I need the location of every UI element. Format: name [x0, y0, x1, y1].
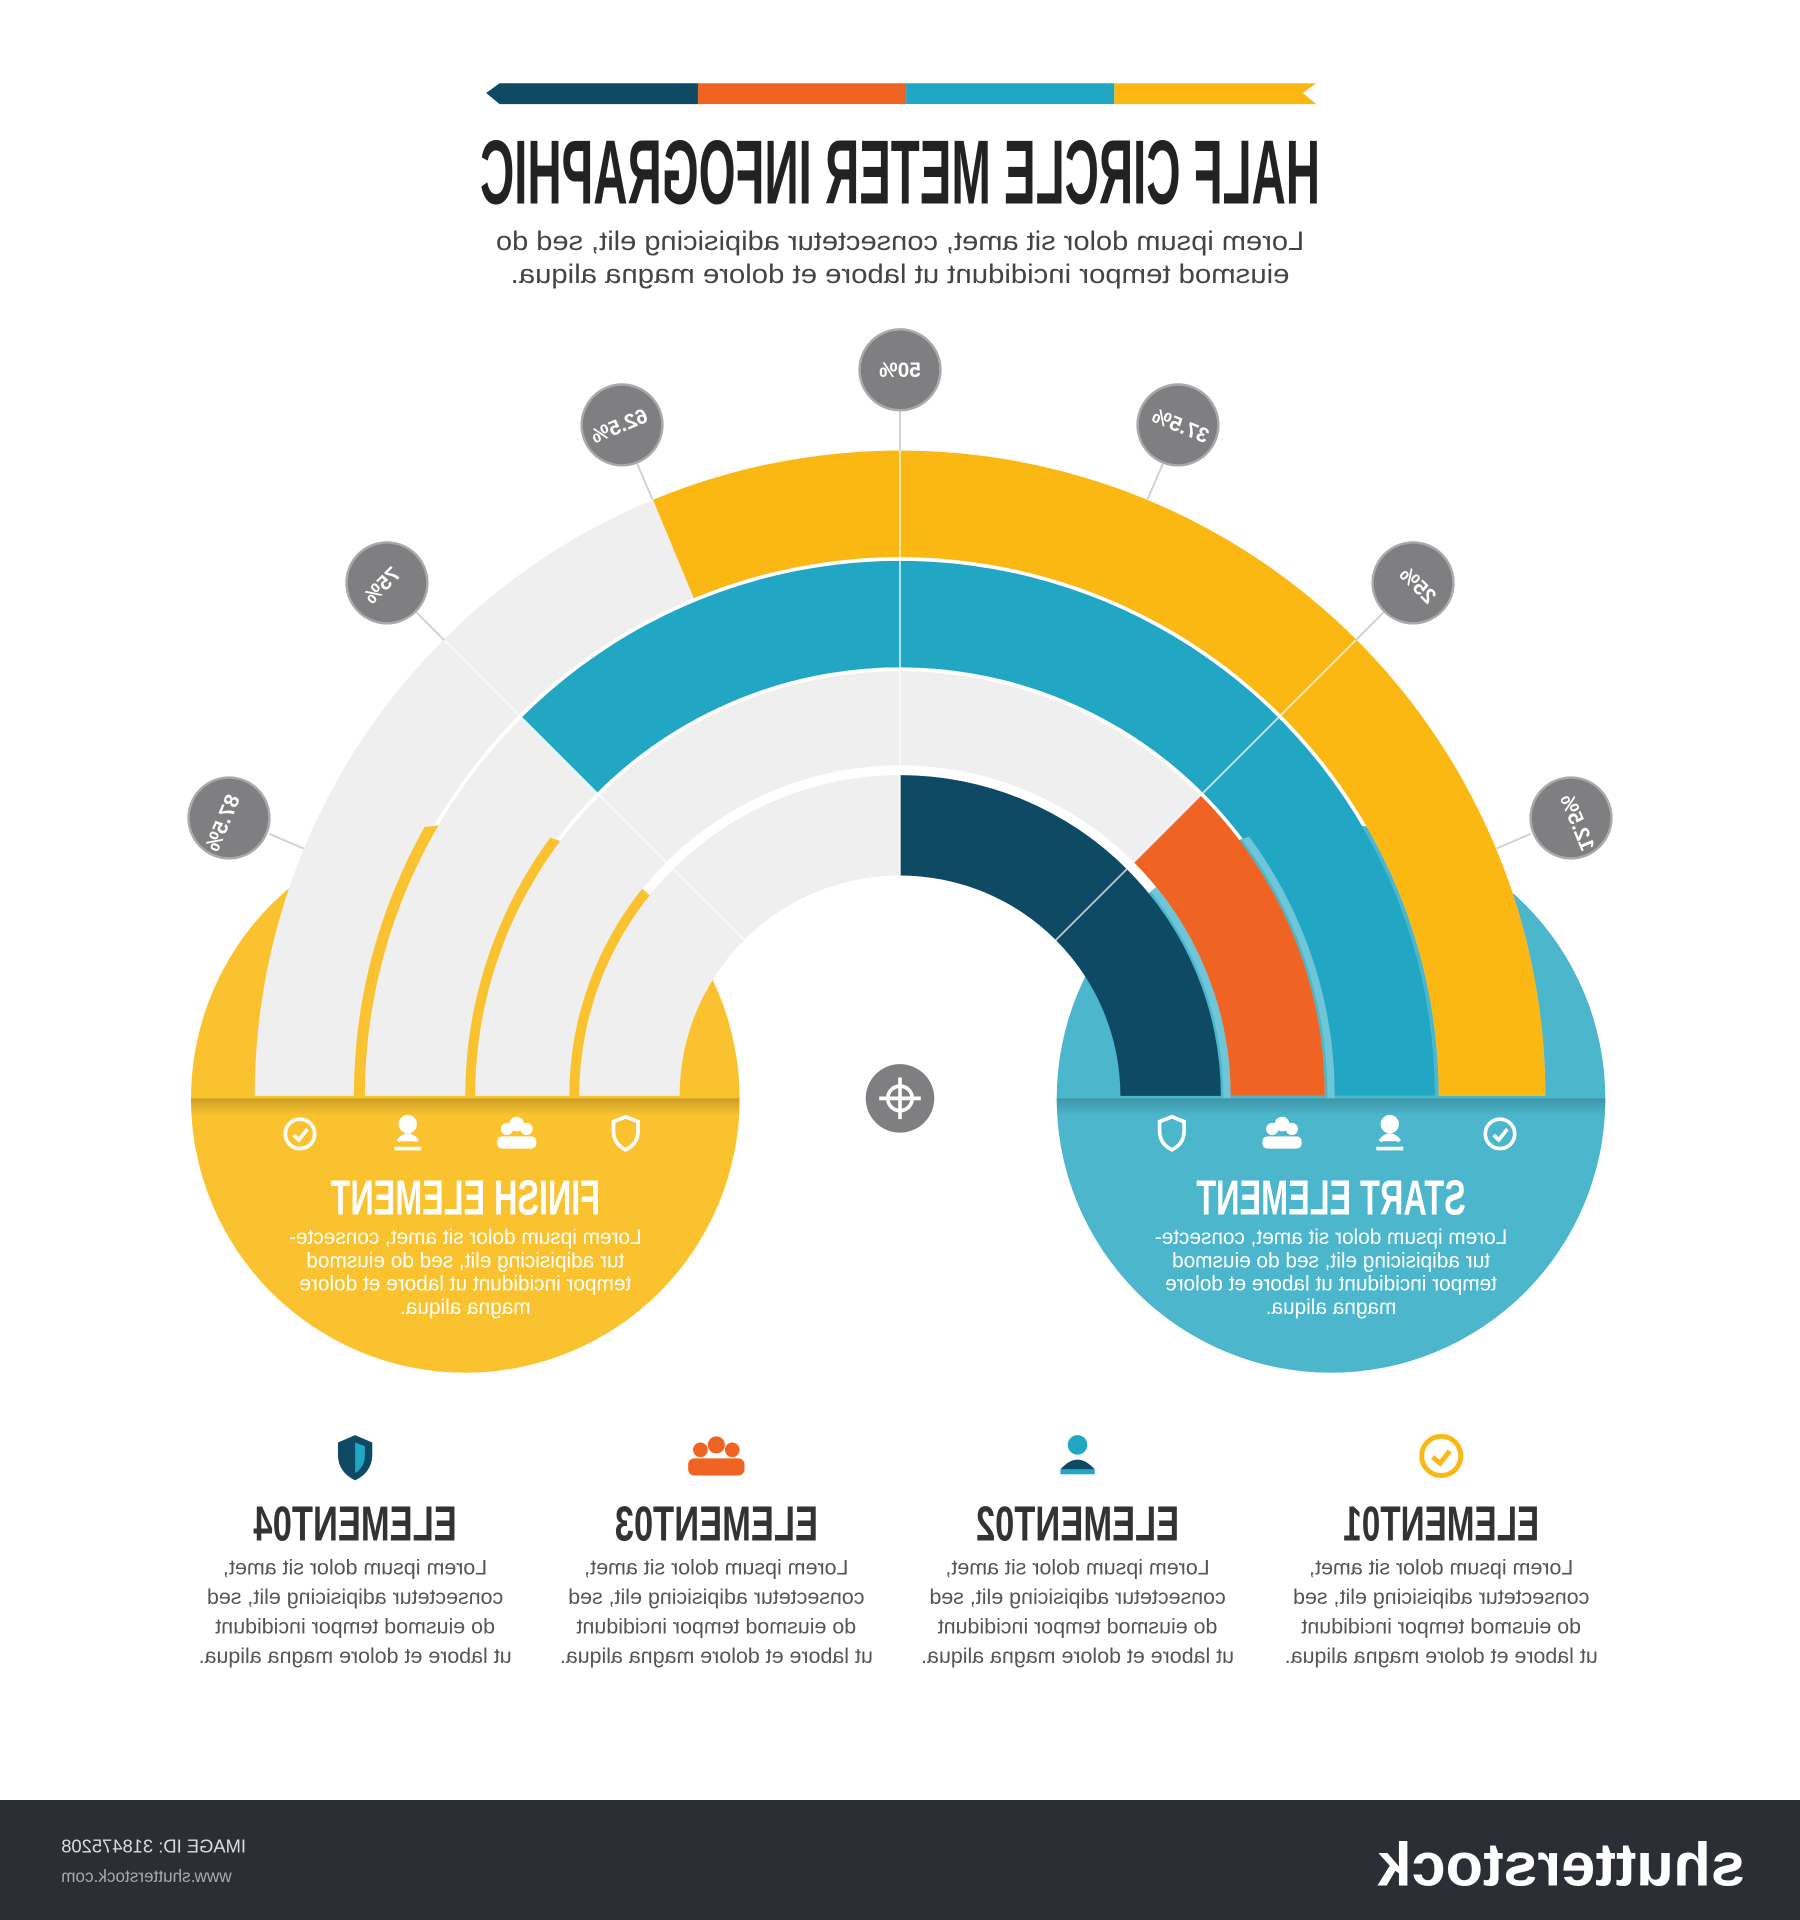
start element text: START ELEMENT [1196, 1172, 1466, 1226]
start element text: Lorem ipsum dolor sit amet, consecte- [1155, 1226, 1507, 1249]
element 04: ut labore et dolore magna aliqua. [199, 1644, 512, 1668]
center target icon [866, 1064, 934, 1133]
mirrored text layer [199, 122, 1599, 1668]
element 03: do eiusmod tempor incididunt [576, 1614, 856, 1638]
footer text: IMAGE ID: 318475208 [61, 1836, 246, 1857]
element 03: consectetur adipisicing elit, sed [568, 1585, 864, 1609]
finish element text: tempor incididunt ut labore et dolore [299, 1273, 631, 1296]
footer text: www.shutterstock.com [61, 1866, 233, 1886]
finish element text [289, 1172, 642, 1319]
element 04: do eiusmod tempor incididunt [215, 1614, 495, 1638]
subtitle: eiusmod tempor incididunt ut labore et dolore magna aliqua. [511, 259, 1289, 289]
element 04: ELEMENT04 [253, 1497, 457, 1551]
element 03: ut labore et dolore magna aliqua. [560, 1644, 873, 1668]
header color bar [486, 83, 1316, 104]
percent labels: 50% [879, 359, 921, 382]
element 01: ut labore et dolore magna aliqua. [1285, 1644, 1598, 1668]
element 03: Lorem ipsum dolor sit amet, [584, 1556, 848, 1580]
element 02: do eiusmod tempor incididunt [938, 1614, 1217, 1638]
bottom icon: person laptop [1060, 1435, 1095, 1474]
percent labels: 25% [1395, 563, 1441, 608]
icons row in start circle [1160, 1117, 1515, 1150]
finish element text: Lorem ipsum dolor sit amet, consecte- [289, 1226, 642, 1249]
lower half of start circle [1053, 1098, 1616, 1380]
element 03: ELEMENT03 [615, 1497, 818, 1551]
element 01: ELEMENT01 [1343, 1497, 1539, 1551]
subtitle [496, 226, 1304, 289]
lower half of finish circle [184, 1098, 747, 1380]
right circle: start element background [1057, 824, 1605, 1373]
element 04: Lorem ipsum dolor sit amet, [223, 1556, 487, 1580]
bottom icon: clock [1422, 1436, 1461, 1476]
finish element text: FINISH ELEMENT [331, 1172, 600, 1226]
start element text: tur adipisicing elit, sed do eiusmod [1172, 1249, 1490, 1272]
percent labels: 87.5% [201, 791, 245, 854]
element 01: do eiusmod tempor incididunt [1301, 1614, 1581, 1638]
start element text: tempor incididunt ut labore et dolore [1165, 1273, 1497, 1296]
subtitle: Lorem ipsum dolor sit amet, consectetur adipisicing elit, sed do [496, 226, 1304, 256]
element 04 [199, 1497, 512, 1668]
footer text [61, 1831, 1745, 1899]
start element text [1155, 1172, 1507, 1319]
element 02: ELEMENT02 [976, 1497, 1179, 1551]
element 03 [560, 1497, 873, 1668]
footer bar [0, 1800, 1800, 1920]
percent markers [189, 329, 1611, 858]
percent labels: 37.5% [1149, 404, 1212, 448]
percent labels: 75% [359, 563, 405, 608]
element 01: Lorem ipsum dolor sit amet, [1309, 1556, 1573, 1580]
element 02 [921, 1497, 1234, 1668]
icons row in finish circle [285, 1117, 638, 1150]
element 02: consectetur adipisicing elit, sed [929, 1585, 1226, 1609]
footer text: shutterstock [1377, 1831, 1745, 1899]
finish element text: tur adipisicing elit, sed do eiusmod [306, 1249, 624, 1272]
finish element text: magna aliqua. [400, 1296, 531, 1319]
element 01: consectetur adipisicing elit, sed [1293, 1585, 1589, 1609]
percent labels: 12.5% [1555, 791, 1599, 854]
element 01 [1285, 1497, 1598, 1668]
percent labels: 62.5% [588, 404, 651, 448]
bottom icon: team [688, 1436, 744, 1476]
percent labels [201, 359, 1599, 854]
element 02: Lorem ipsum dolor sit amet, [945, 1556, 1210, 1580]
element 02: ut labore et dolore magna aliqua. [921, 1644, 1234, 1668]
meter arcs [255, 410, 1545, 1638]
bottom icon: shield [338, 1435, 372, 1480]
left circle: finish element background [191, 824, 740, 1373]
element 04: consectetur adipisicing elit, sed [207, 1585, 503, 1609]
start element text: magna aliqua. [1266, 1296, 1396, 1319]
